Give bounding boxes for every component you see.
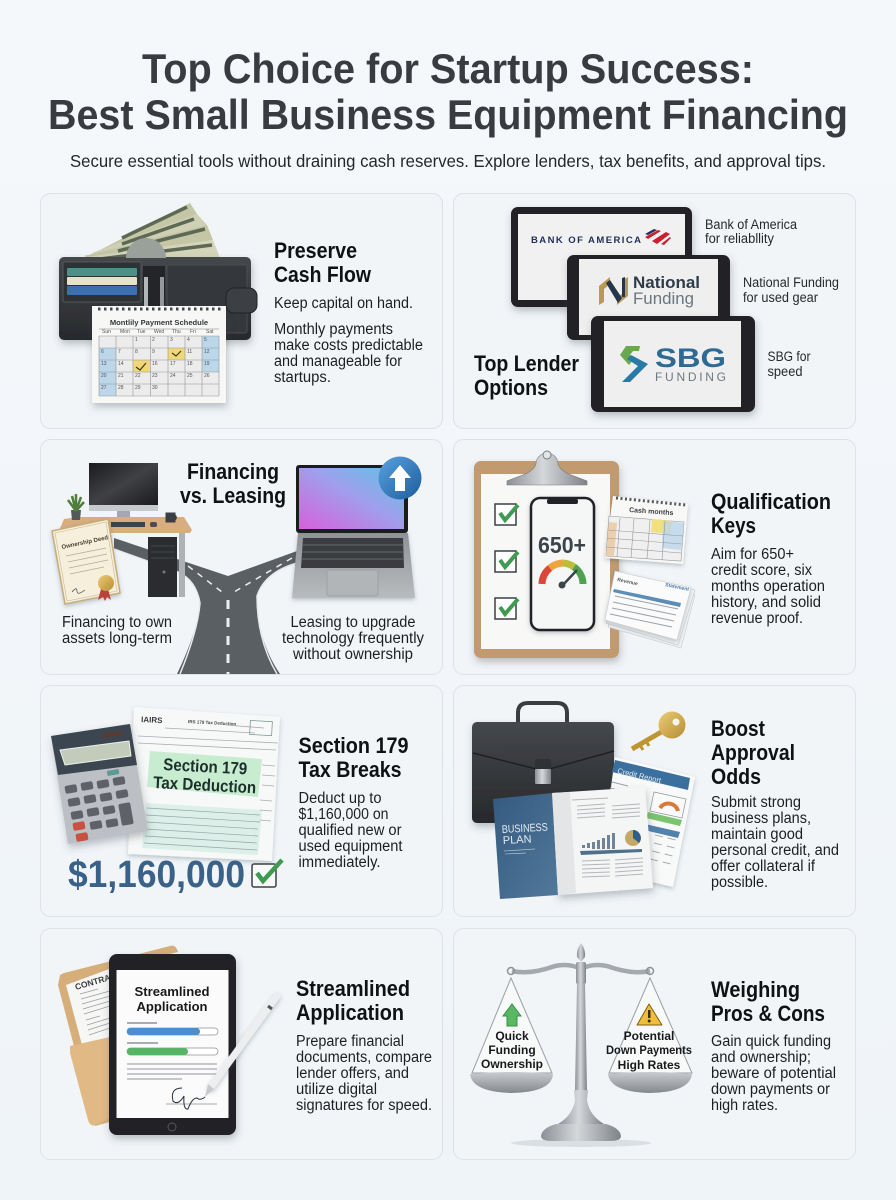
label: pros	[481, 1029, 543, 1071]
icon: monthly payment calendar	[92, 306, 226, 403]
illustration: credit report: Credit Report	[617, 766, 663, 785]
heading: top lender options: Top Lender	[474, 351, 579, 376]
icon: warning triangle	[637, 1004, 662, 1025]
icon: monthly payment calendar: 27	[101, 385, 107, 391]
illustration: calculator	[51, 724, 148, 844]
label: cons: Potential	[624, 1029, 674, 1043]
heading: weighing pros and cons	[711, 977, 825, 1026]
label: bank of america	[705, 217, 797, 246]
icon: monthly payment calendar: Montlily Payment Schedule	[110, 318, 208, 327]
text: boost approval body: personal credit, and	[711, 842, 839, 859]
illustration: forked road	[114, 538, 297, 674]
label: sbg: speed	[768, 364, 802, 379]
text: section 179 body: immediately.	[298, 854, 380, 871]
tablet: sbg funding	[591, 316, 755, 412]
icon: monthly payment calendar: 4	[187, 337, 190, 343]
heading: financing vs leasing: Financing	[187, 459, 279, 484]
icon: monthly payment calendar: 11	[187, 349, 192, 355]
text: qualification body: Aim for 650+	[711, 546, 794, 563]
label: national funding: National Funding	[743, 275, 839, 290]
icon: monthly payment calendar: Wed	[154, 329, 164, 335]
label: financing: assets long-term	[62, 630, 172, 647]
illustration: laptop with upgrade badge	[292, 456, 422, 598]
text: section 179 body: Deduct up to	[298, 790, 382, 807]
text: qualification body: credit score, six	[711, 562, 812, 579]
icon: monthly payment calendar: 1	[135, 337, 138, 343]
text: monthly payments: startups.	[274, 369, 331, 386]
subtitle: Secure essential tools without draining cash reserves. Explore lenders, tax benefits, and approval tips.	[70, 151, 826, 171]
icon: monthly payment calendar: 16	[152, 361, 158, 367]
icon: monthly payment calendar: 3	[170, 337, 173, 343]
panel: qualification keys	[454, 440, 856, 674]
illustration: contract folder	[58, 946, 178, 1126]
illustration: business plan book: PLAN	[503, 834, 532, 847]
illustration: tablet with application form	[109, 954, 236, 1135]
illustration: ownership deed	[52, 519, 120, 604]
label: financing	[62, 614, 172, 647]
heading: weighing pros and cons: Pros & Cons	[711, 1001, 825, 1026]
icon: monthly payment calendar: Thu	[172, 329, 181, 335]
icon: monthly payment calendar: Fri	[190, 329, 196, 335]
text: streamlined body: documents, compare	[296, 1049, 432, 1066]
illustration: tablet with application form: Streamlined	[134, 984, 210, 999]
label: national funding	[743, 275, 839, 305]
label: cons: Down Payments	[606, 1043, 692, 1057]
text: section 179 body: qualified new or	[298, 822, 402, 839]
text: monthly payments	[274, 321, 423, 386]
text: monthly payments: make costs predictable	[274, 337, 423, 354]
icon: wallet with cash	[59, 203, 257, 340]
icon: monthly payment calendar: 23	[152, 373, 158, 379]
icon: monthly payment calendar: 30	[152, 385, 158, 391]
text: qualification body: months operation	[711, 578, 825, 595]
text: boost approval body: offer collateral if	[711, 858, 816, 875]
text: streamlined body: lender offers, and	[296, 1065, 409, 1082]
icon: monthly payment calendar: 9	[152, 349, 155, 355]
icon: monthly payment calendar: 26	[204, 373, 210, 379]
heading: streamlined application	[296, 976, 410, 1025]
icon: monthly payment calendar: 22	[135, 373, 141, 379]
heading: section 179 tax breaks	[298, 733, 408, 782]
text: weighing body: high rates.	[711, 1097, 778, 1114]
text: weighing body: down payments or	[711, 1081, 830, 1098]
text: streamlined body: Prepare financial	[296, 1033, 404, 1050]
label: national funding: for used gear	[743, 290, 818, 305]
illustration: financial statements	[605, 571, 695, 648]
title	[48, 45, 848, 138]
heading: section 179 tax breaks: Tax Breaks	[298, 757, 402, 782]
text: boost approval body: Submit strong	[711, 794, 801, 811]
label: cons: High Rates	[618, 1058, 681, 1072]
icon: monthly payment calendar: 17	[170, 361, 176, 367]
text: section 179 body: $1,160,000 on	[298, 806, 388, 823]
icon: monthly payment calendar: 29	[135, 385, 141, 391]
heading: boost approval odds: Approval	[711, 740, 795, 765]
tablet: sbg funding: SBG	[655, 343, 726, 373]
label: leasing	[282, 614, 424, 663]
icon: monthly payment calendar: Sun	[102, 329, 111, 335]
icon: green up arrow	[503, 1004, 521, 1026]
label: pros: Funding	[488, 1043, 536, 1057]
heading: financing vs leasing	[180, 459, 286, 508]
illustration: business plan book	[493, 787, 653, 899]
icon: monthly payment calendar: 21	[118, 373, 124, 379]
illustration: tax form: IAIRS	[141, 715, 163, 725]
text: monthly payments: and manageable for	[274, 353, 402, 370]
text: qualification body	[711, 546, 825, 627]
text: qualification body: revenue proof.	[711, 610, 803, 627]
text: section 179 body	[298, 790, 403, 871]
icon: monthly payment calendar: 7	[118, 349, 121, 355]
icon: monthly payment calendar: 8	[135, 349, 138, 355]
icon: monthly payment calendar: Tue	[137, 329, 146, 335]
illustration: tax form	[128, 707, 280, 861]
text: monthly payments: Monthly payments	[274, 321, 393, 338]
illustration: financial statements: Revenue	[617, 577, 638, 587]
icon: monthly payment calendar: Sat	[206, 329, 214, 335]
tablet: sbg funding: FUNDING	[655, 370, 726, 384]
label: leasing: technology frequently	[282, 630, 424, 647]
icon: monthly payment calendar: Mon	[120, 329, 130, 335]
illustration: ownership deed: Ownership Deed	[61, 535, 109, 551]
panel: section 179	[40, 686, 442, 916]
label: leasing: Leasing to upgrade	[290, 614, 416, 631]
icon: monthly payment calendar: 25	[187, 373, 193, 379]
icon: monthly payment calendar: 14	[118, 361, 124, 367]
illustration: small calendar	[605, 496, 688, 564]
heading: top lender options: Options	[474, 375, 548, 400]
tablet: national funding: Funding	[633, 289, 694, 308]
illustration: financial statements: Statement	[665, 582, 690, 593]
text: weighing body: Gain quick funding	[711, 1033, 831, 1050]
illustration: clipboard	[474, 451, 619, 658]
icon: monthly payment calendar: 28	[118, 385, 124, 391]
panel: financing vs leasing	[40, 440, 442, 674]
label: bank of america: Bank of America	[705, 217, 797, 232]
heading: boost approval odds: Boost	[711, 716, 766, 741]
illustration: phone with 650+ credit score	[531, 498, 594, 630]
illustration: business plan book: BUSINESS	[502, 822, 548, 836]
icon: monthly payment calendar: 20	[101, 373, 107, 379]
heading: preserve cash flow: Cash Flow	[274, 262, 372, 287]
title: Top Choice for Startup Success:	[142, 45, 754, 92]
label: financing: Financing to own	[62, 614, 172, 631]
heading: financing vs leasing: vs. Leasing	[180, 483, 286, 508]
tablet: national funding	[567, 255, 730, 340]
label: sbg	[768, 349, 811, 379]
panel: preserve cash flow	[40, 194, 442, 428]
heading: streamlined application: Application	[296, 1000, 404, 1025]
heading: preserve cash flow: Preserve	[274, 238, 357, 263]
panel: streamlined application	[40, 928, 442, 1160]
illustration: tax form: IRS 179 Tax Deduction	[188, 719, 237, 727]
heading: qualification keys	[711, 489, 831, 538]
panel: boost approval odds	[454, 686, 856, 916]
illustration: gold key	[632, 712, 686, 750]
text: qualification body: history, and solid	[711, 594, 821, 611]
illustration: contract folder: CONTRACT	[74, 969, 123, 992]
icon: monthly payment calendar: 6	[101, 349, 104, 355]
label: pros: Quick	[495, 1029, 529, 1043]
panel: weighing pros and cons	[454, 928, 856, 1160]
tablet: national funding: National	[633, 273, 700, 292]
text: boost approval body: business plans,	[711, 810, 811, 827]
heading: boost approval odds	[711, 716, 795, 789]
text: keep capital: Keep capital on hand.	[274, 295, 413, 312]
illustration: briefcase	[472, 703, 614, 823]
illustration: desk and monitor	[58, 463, 192, 597]
illustration: tablet with application form: Application	[136, 999, 208, 1014]
panel: top lender options	[454, 194, 856, 428]
icon: monthly payment calendar: 5	[204, 337, 207, 343]
icon: monthly payment calendar: 24	[170, 373, 176, 379]
text: streamlined body	[296, 1033, 432, 1114]
illustration: phone with 650+ credit score: 650+	[538, 532, 586, 558]
heading: top lender options	[474, 351, 579, 400]
illustration: small calendar: Cash months	[629, 507, 674, 517]
text: streamlined body: signatures for speed.	[296, 1097, 432, 1114]
icon: check box	[252, 860, 282, 887]
tablet: bank of america	[511, 207, 692, 307]
label: sbg: SBG for	[768, 349, 811, 364]
heading: weighing pros and cons: Weighing	[711, 977, 800, 1002]
tablet: bank of america: BANK OF AMERICA	[531, 235, 641, 246]
text: boost approval body: maintain good	[711, 826, 803, 843]
text: streamlined body: utilize digital	[296, 1081, 377, 1098]
illustration: tax form: Tax Deduction	[153, 773, 257, 797]
icon: monthly payment calendar: 19	[204, 361, 210, 367]
heading: boost approval odds: Odds	[711, 764, 761, 789]
heading: preserve cash flow	[274, 238, 372, 287]
icon: monthly payment calendar: 12	[204, 349, 210, 355]
illustration: balance scale	[470, 943, 692, 1147]
text: section 179 body: used equipment	[298, 838, 403, 855]
amount: $1,160,000: $1,160,000	[68, 854, 245, 896]
text: boost approval body	[711, 794, 839, 891]
label: pros: Ownership	[481, 1057, 543, 1071]
heading: streamlined application: Streamlined	[296, 976, 410, 1001]
text: weighing body	[711, 1033, 836, 1114]
title: Best Small Business Equipment Financing	[48, 91, 848, 138]
text: boost approval body: possible.	[711, 874, 768, 891]
icon: monthly payment calendar: 18	[187, 361, 193, 367]
icon: monthly payment calendar: 2	[152, 337, 155, 343]
icon: monthly payment calendar: 13	[101, 361, 107, 367]
heading: qualification keys: Keys	[711, 513, 756, 538]
heading: qualification keys: Qualification	[711, 489, 831, 514]
illustration: credit report	[600, 757, 695, 887]
heading: section 179 tax breaks: Section 179	[298, 733, 408, 758]
illustration: stylus	[205, 996, 277, 1097]
text: weighing body: beware of potential	[711, 1065, 836, 1082]
illustration: tax form: Section 179	[163, 755, 248, 778]
label: bank of america: for reliabllity	[705, 231, 774, 246]
text: weighing body: and ownership;	[711, 1049, 811, 1066]
label: cons	[606, 1029, 692, 1072]
label: leasing: without ownership	[292, 646, 413, 663]
